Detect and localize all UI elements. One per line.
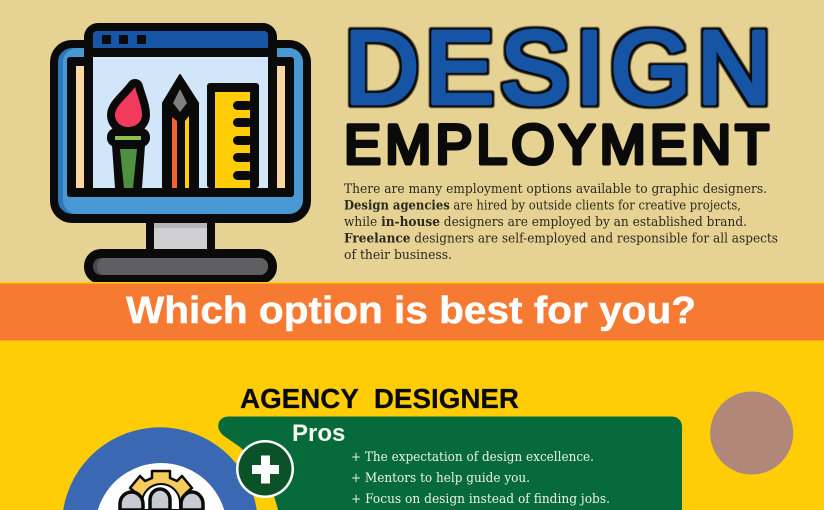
section heading: agency designer: AGENCY DESIGNER [240,383,519,414]
decorative circle [710,392,793,474]
icon: plus badge [236,440,294,498]
intro text block [344,182,778,263]
icon: agency team badge [63,427,257,510]
intro text block: Design agencies are hired by outside clients for creative projects, [344,198,741,214]
pros list [351,450,610,507]
pros list: + Focus on design instead of finding jobs. [351,492,610,507]
banner heading: Which option is best for you? [126,290,696,332]
pros list: + The expectation of design excellence. [351,450,594,465]
icon: people [120,489,203,510]
icon: gear [130,471,192,500]
icon: paint brush [107,87,150,188]
title: DESIGN: DESIGN [344,10,772,125]
title: EMPLOYMENT: EMPLOYMENT [344,114,769,176]
intro text block: There are many employment options available to graphic designers. [344,182,767,197]
header background [0,0,824,283]
banner [0,282,824,342]
icon: monitor with design tools [50,23,311,284]
intro text block: Freelance designers are self-employed and responsible for all aspects [344,232,778,246]
pros list: + Mentors to help guide you. [351,471,530,486]
icon: pencil [163,75,198,188]
intro text block: while in-house designers are employed by an established brand. [344,215,747,230]
intro text block: of their business. [344,248,452,263]
panel: pros [218,416,682,510]
icon: ruler [207,83,259,188]
pros heading: Pros [292,420,345,447]
